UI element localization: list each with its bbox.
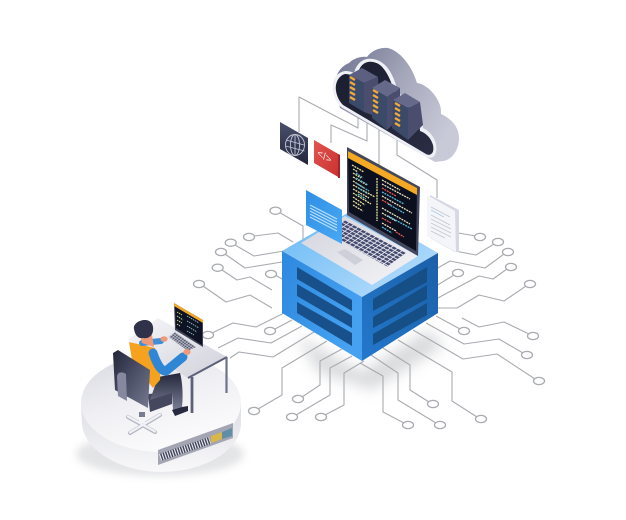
cloud back extrusion	[335, 48, 459, 162]
cloud with server racks	[333, 48, 459, 162]
platform top	[81, 354, 241, 452]
hair	[134, 320, 153, 338]
chair column	[139, 406, 145, 423]
keyboard	[327, 220, 406, 267]
cloud dark inner	[336, 62, 433, 155]
circuit traces	[194, 207, 544, 429]
server rack 2	[372, 80, 400, 130]
small laptop	[167, 303, 203, 353]
hands	[160, 336, 168, 342]
round platform	[81, 354, 241, 472]
platform shadow	[76, 432, 244, 476]
connector lines from cloud to icons	[299, 97, 437, 198]
icon: globe tile	[280, 122, 308, 165]
platform vent	[158, 423, 233, 465]
icon: paper document	[427, 195, 459, 252]
near arm	[153, 353, 183, 371]
icon: code tile: </>	[318, 147, 331, 167]
chair seat	[148, 392, 172, 412]
server rack 3	[392, 93, 423, 140]
neck	[140, 335, 154, 347]
yellow title bar	[348, 151, 417, 195]
icon: blue floating panel	[306, 190, 342, 244]
code lines	[352, 165, 412, 237]
right vents	[373, 267, 427, 345]
server rack 1	[349, 68, 380, 118]
shadow under server cube	[296, 330, 444, 390]
icon: code tile	[314, 140, 340, 178]
legs	[150, 373, 183, 410]
cloud white rim	[333, 59, 436, 158]
platform side	[81, 403, 241, 472]
shoe	[172, 406, 188, 416]
laptop base	[301, 216, 418, 285]
rack status lights	[350, 77, 400, 126]
laptop	[301, 147, 420, 285]
far arm	[142, 341, 161, 343]
chair back	[113, 350, 150, 408]
torso vest	[129, 342, 160, 388]
chair armrest	[117, 372, 127, 401]
left vents	[297, 267, 352, 346]
chair base	[128, 414, 160, 433]
laptop screen	[347, 147, 420, 256]
server cube	[282, 207, 438, 361]
person and chair	[113, 320, 191, 433]
trackpad	[337, 249, 363, 265]
desk	[128, 318, 227, 413]
